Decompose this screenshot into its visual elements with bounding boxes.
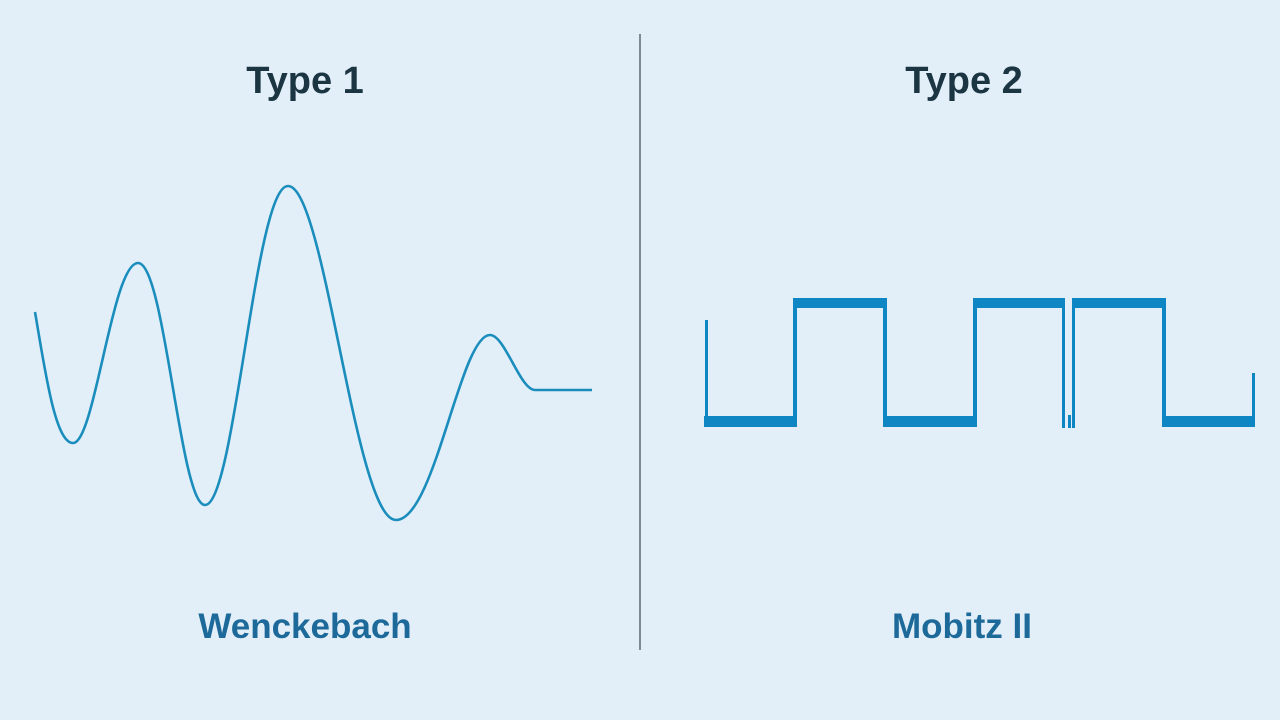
divider [639,34,641,650]
label: Mobitz II: Mobitz II [892,607,1032,646]
title: Type 2: Type 2 [905,60,1023,102]
chart: Type 2 square wave [704,298,1255,428]
chart: Type 1 waveform [34,184,592,522]
label: Wenckebach: Wenckebach [198,607,412,646]
title: Type 1: Type 1 [246,60,364,102]
